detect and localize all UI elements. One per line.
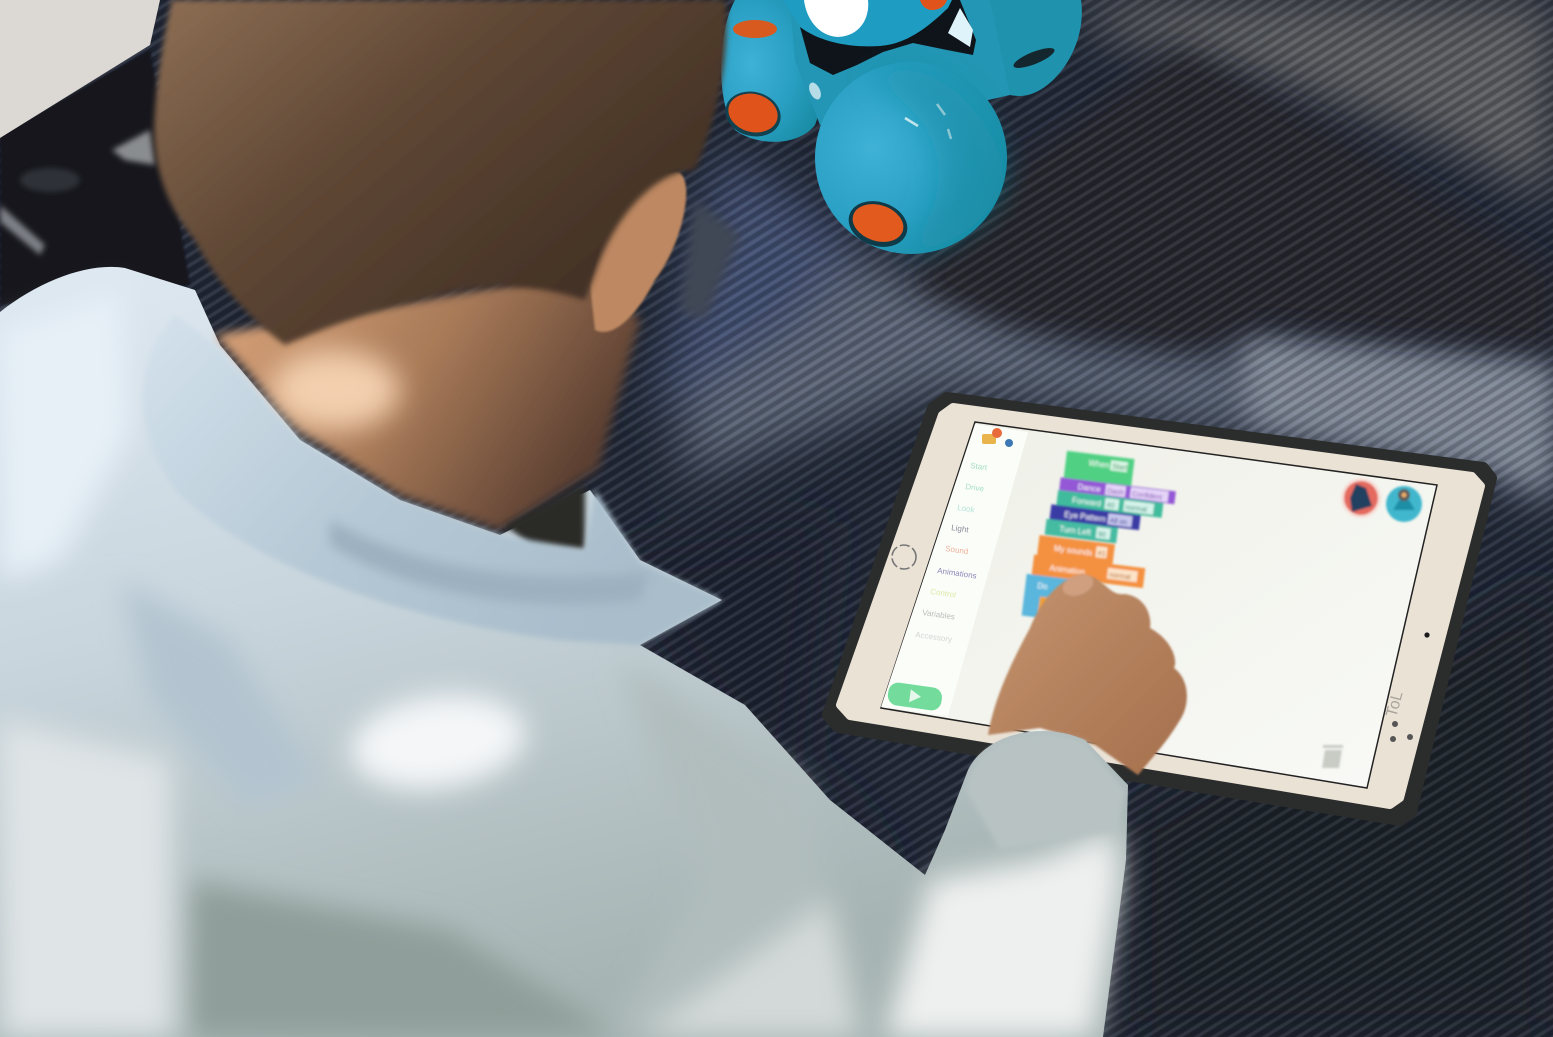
character avatars	[1341, 478, 1422, 522]
block: repeat loop	[1022, 574, 1086, 623]
trash icon	[1322, 745, 1343, 768]
sidebar category labels: Start	[970, 461, 988, 472]
block: Turn Left	[1045, 519, 1118, 543]
boy's shirt	[0, 267, 1128, 1037]
sidebar category labels: Animations	[937, 566, 977, 580]
block: My sounds	[1037, 535, 1115, 564]
block: My sounds: #1	[1097, 550, 1106, 558]
robot sphere slot	[1011, 44, 1057, 72]
robot light triangle	[948, 8, 973, 47]
boy's hair	[154, 0, 726, 345]
sticker with logo: ToL	[1383, 690, 1407, 719]
robot body	[790, 0, 1010, 125]
block: When start: Start	[1112, 463, 1128, 472]
block: Forward: normal	[1125, 504, 1148, 514]
block: Animation: Animation	[1049, 564, 1085, 577]
block: When start: When	[1088, 459, 1110, 470]
sidebar category labels: Accessory	[915, 630, 953, 644]
child's hand on the screen	[988, 570, 1187, 775]
block: Animation	[1032, 555, 1145, 588]
robot right sphere	[958, 0, 1082, 96]
block: Eye Pattern: Eye Pattern	[1064, 510, 1106, 524]
play button	[887, 681, 943, 712]
block: Dance: Dash	[1107, 488, 1124, 497]
block: Forward: Forward	[1071, 496, 1102, 508]
block: Eye Pattern	[1050, 504, 1141, 530]
block: My sounds: My sounds	[1053, 544, 1093, 558]
ear	[590, 172, 686, 332]
shirt torso and sleeve	[0, 267, 1128, 1037]
camera dot	[1424, 632, 1430, 638]
sidebar category labels: Sound	[945, 544, 969, 556]
sidebar category labels: Control	[930, 587, 957, 600]
shirt shading	[0, 290, 860, 1037]
large shadow on carpet	[910, 50, 1553, 350]
home button	[892, 545, 916, 569]
block: Turn Left: Turn Left	[1059, 525, 1092, 537]
block: Eye Pattern: All on	[1109, 518, 1128, 527]
block: Animation: normal	[1109, 572, 1131, 582]
tablet screen	[881, 422, 1437, 788]
neck skin	[215, 270, 640, 530]
tablet rubber case	[828, 398, 1491, 820]
robot black face band	[800, 0, 976, 75]
sidebar category labels: Variables	[922, 608, 955, 622]
block: repeat loop: Do	[1037, 581, 1049, 591]
sidebar category labels: Look	[957, 503, 976, 515]
block: Dance	[1059, 477, 1176, 504]
robot: blue Dash toy	[720, 0, 1082, 254]
tablet white bezel	[840, 407, 1481, 805]
block: Turn Left: 90	[1098, 531, 1106, 539]
block: Dance: Dance	[1077, 482, 1102, 494]
shirt sleeve highlight	[885, 830, 1120, 1037]
robot head dome	[783, 0, 952, 46]
table corner with paper and dark floor	[0, 0, 190, 305]
collar	[143, 315, 722, 645]
block: Forward	[1056, 490, 1163, 518]
sidebar category labels: Light	[951, 523, 970, 535]
block: When start	[1064, 451, 1135, 486]
code block stack	[1022, 448, 1179, 632]
block: Dance: Confident	[1132, 491, 1162, 502]
app sidebar	[881, 424, 1028, 716]
robot front sphere	[815, 62, 1007, 254]
sticker with logo	[1383, 690, 1413, 742]
neck and ear	[215, 172, 686, 550]
sidebar category labels	[915, 461, 988, 644]
tablet	[828, 398, 1491, 820]
shadow under collar	[505, 485, 585, 550]
block: Forward: 40	[1106, 502, 1115, 510]
sleeve cuff	[966, 734, 1125, 850]
glasses arm	[680, 200, 740, 320]
neck highlight	[270, 350, 400, 430]
sidebar category labels: Drive	[965, 482, 985, 494]
robot body button	[807, 81, 823, 101]
app logo icons	[982, 428, 1013, 447]
light carpet band	[1240, 335, 1553, 495]
robot left wheel sphere	[720, 0, 822, 142]
